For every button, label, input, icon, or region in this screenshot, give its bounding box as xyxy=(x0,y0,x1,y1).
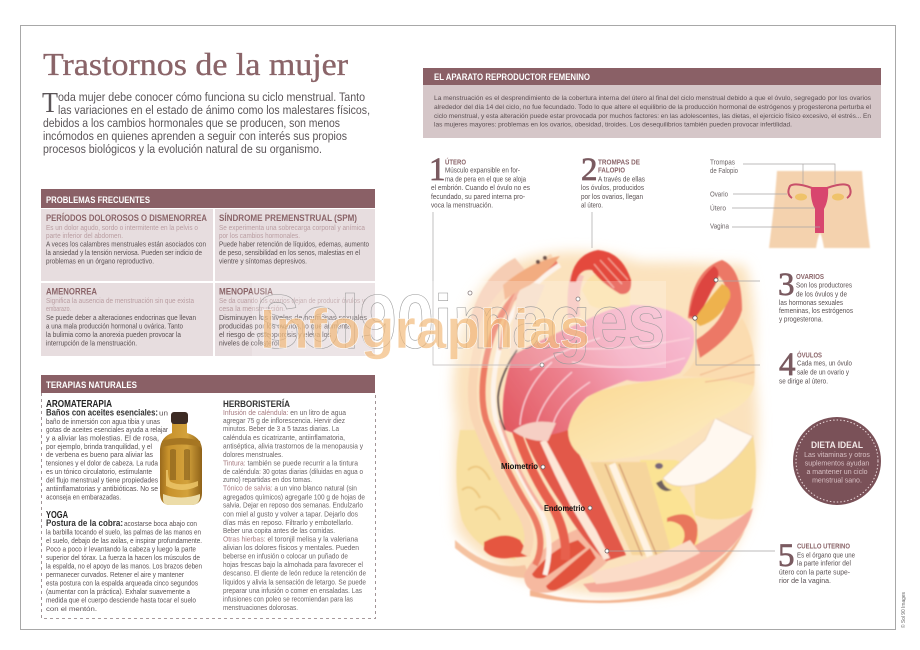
section header xyxy=(41,189,375,208)
diagram leaders xyxy=(732,164,835,227)
callout: dieta ideal: DIETA IDEAL xyxy=(811,440,863,451)
panel: sindrome premenstrual xyxy=(215,209,375,281)
panel: amenorrea: embarazo. xyxy=(46,306,71,313)
text block: yoga: medida que el cuerpo desciende hasta tocar el suelo xyxy=(46,596,196,604)
callout 5: cuello uterino: útero con la parte supe- xyxy=(779,570,851,576)
credit: © Sol 90 Images xyxy=(900,592,907,628)
text block: herboristeria: hojas frescas bajo la almohada para favorecer el xyxy=(223,560,363,569)
explanatory text: La menstruación es el desprendimiento de la cobertura interna del útero al final del ciclo menstrual debido a que el óvulo, segregado por los ovarios xyxy=(434,95,872,102)
text block: herboristeria: antiséptica, alivia trastornos de la menopausia y xyxy=(223,442,363,450)
text block: yoga: con el mentón. xyxy=(46,606,97,613)
text block: herboristeria: dolores menstruales. xyxy=(223,450,283,459)
explanatory text: alrededor del día 14 del ciclo, no fue fecundado. Todo lo que altere el equilibrio de la producción hormonal de estrógenos y progesterona perturba el xyxy=(434,104,871,111)
text block: herboristeria: menstruaciones dolorosas. xyxy=(223,603,298,612)
callout: dieta ideal: Las vitaminas y otros xyxy=(804,452,870,459)
fat left xyxy=(456,430,530,560)
text block: herboristeria: con miel al gusto y volver a tapar. Dejarlo dos xyxy=(223,510,358,518)
callout 2: trompas de falopio xyxy=(581,152,645,210)
intro text block: debidos a los cambios hormonales que se producen, son menos xyxy=(43,116,340,130)
text block: herboristeria: caléndula es cicatrizante, antiinflamatoria, xyxy=(223,433,345,442)
body silhouette xyxy=(769,171,870,248)
cervix / uterine neck column xyxy=(522,430,626,561)
callout 2: trompas de falopio: por los ovarios, llegan xyxy=(581,194,643,201)
panel: amenorrea: Se puede deber a alteraciones endocrinas que llevan xyxy=(46,315,196,322)
callout 4: ovulos: 4 xyxy=(779,347,796,383)
label: miometrio: Miometrio xyxy=(501,462,538,471)
text block: aromaterapia: por ejemplo, brinda tranquilidad, y el xyxy=(46,442,152,451)
callout 4: ovulos: Cada mes, un óvulo xyxy=(797,360,852,368)
text block: aromaterapia: AROMATERAPIA xyxy=(46,399,112,410)
section header xyxy=(423,68,881,85)
text block: yoga xyxy=(46,510,202,613)
panel: dismenorrea: la ansiedad y la tensión nerviosa. Pueden ser indicio de xyxy=(46,250,202,257)
callout 2: trompas de falopio: 2 xyxy=(581,152,598,188)
panel: sindrome premenstrual: Puede haber retención de líquidos, edemas, aumento xyxy=(219,242,369,248)
section: el aparato reproductor femenino xyxy=(423,68,881,138)
vaginal fat column xyxy=(590,462,672,555)
dark line behind uterus xyxy=(498,350,517,430)
text block: aromaterapia: del flujo menstrual y tiene propiedades xyxy=(46,476,158,484)
text block: yoga: esta postura con la espalda arqueada cinco segundos xyxy=(46,578,198,588)
text block: herboristeria: Tónico de salvia: a un vino blanco natural (sin xyxy=(223,484,357,492)
text block: aromaterapia: baño de inmersión con agua tibia y unas xyxy=(46,417,160,426)
callout 2: trompas de falopio: los óvulos, producidos xyxy=(581,185,644,192)
intro text block: oda mujer debe conocer cómo funciona su ciclo menstrual. Tanto xyxy=(58,90,365,104)
speckled tissue xyxy=(470,258,525,350)
white bulge xyxy=(663,418,753,486)
callout 1: utero: 1 xyxy=(429,152,446,188)
callout 3: ovarios: OVARIOS xyxy=(796,274,824,281)
text block: herboristeria: líquidos y alivia la sensación de letargo. Se puede xyxy=(223,578,366,586)
panel: menopausia: niveles de colesterol. xyxy=(219,340,281,348)
text block: yoga: superior del tórax. La fuerza la hacen los músculos de xyxy=(46,553,200,562)
text block: herboristeria: días más en reposo. Filtrarlo y embotellarlo. xyxy=(223,518,353,527)
panel: amenorrea: a una mala producción hormonal u ovárica. Tanto xyxy=(46,324,183,330)
watermark overlay: Infographias xyxy=(260,297,590,360)
panel: dismenorrea: PERÍODOS DOLOROSOS O DISMENORREA xyxy=(46,213,207,224)
text block: herboristeria: agregados químicos) agregarle 100 g de hojas de xyxy=(223,492,365,502)
panel: menopausia: producidas por los ovarios, lo que aumenta xyxy=(219,324,351,330)
panel: dismenorrea: Es un dolor agudo, sordo o intermitente en la pelvis o xyxy=(46,225,198,232)
diagram labels xyxy=(710,160,738,230)
callout 5: cuello uterino xyxy=(778,538,855,585)
text block: aromaterapia: gotas de aceites esenciales ayuda a relajar xyxy=(46,425,168,434)
icon: oil bottle xyxy=(160,412,202,505)
watermark overlay: Sol90images xyxy=(255,280,665,365)
panel: amenorrea: Significa la ausencia de menstruación sin que exista xyxy=(46,298,194,305)
panel: sindrome premenstrual: de peso, sensibilidad en los senos, malestias en el xyxy=(219,250,360,257)
section header: PROBLEMAS FRECUENTES xyxy=(46,195,150,206)
label: endometrio: Endometrio xyxy=(544,504,585,513)
section header xyxy=(41,375,375,393)
panel: amenorrea xyxy=(41,283,213,356)
callout 3: ovarios: 3 xyxy=(778,267,794,303)
panel: sindrome premenstrual: Se experimenta una sobrecarga corporal y anímica xyxy=(219,225,365,232)
leader lines xyxy=(433,212,775,551)
text block: herboristeria: salvia. Dejar en reposo dos semanas. Endulzarlo xyxy=(223,500,363,510)
panel: dismenorrea: parte inferior del abdomen. xyxy=(46,233,123,240)
callout: dieta ideal: menstrual sano. xyxy=(812,478,862,484)
upper left organ wedge xyxy=(503,256,560,300)
text block: aromaterapia xyxy=(46,399,168,502)
text block: yoga: Postura de la cobra: xyxy=(46,518,123,528)
vagina pouch xyxy=(524,528,612,593)
right tube and ovary xyxy=(688,260,742,358)
panel: amenorrea: interrupción de la menstruación. xyxy=(46,340,137,348)
text block: yoga: la barbilla tocando el suelo, las palmas de las manos en xyxy=(46,528,201,536)
rear wall bands xyxy=(472,258,553,555)
text block: herboristeria: preparar una infusión o comer en ensaladas. Las xyxy=(223,586,362,595)
callout 2: trompas de falopio: TROMPAS DE xyxy=(598,160,640,166)
left lower wall outer xyxy=(455,540,530,578)
callout 3: ovarios: de los óvulos y de xyxy=(796,292,847,298)
text block: herboristeria: zumo) repartidas en dos tomas. xyxy=(223,475,312,484)
pelvic fold right xyxy=(682,318,755,386)
callout 1: utero: fecundado, su pared interna pro- xyxy=(431,194,526,201)
text block: yoga: el suelo, debajo de las axilas, e inspirar profundamente. xyxy=(46,536,202,545)
soft background tissue xyxy=(453,252,758,596)
bladder xyxy=(568,378,754,462)
text block: aromaterapia: aconseja en embarazadas. xyxy=(46,492,121,502)
text block: herboristeria: Infusión de caléndula: en un litro de agua xyxy=(223,408,347,417)
section: problemas frecuentes xyxy=(41,189,375,356)
drop cap: T xyxy=(42,88,58,119)
panel: dismenorrea xyxy=(41,209,213,281)
callout 4: ovulos: se dirige al útero. xyxy=(779,378,828,386)
text block: herboristeria: Tintura: también se puede recurrir a la tintura xyxy=(223,458,359,468)
text block: aromaterapia: antiinflamatorias y antibióticas. No se xyxy=(46,484,158,493)
panel: amenorrea: la bulimia como la anorexia pueden provocar la xyxy=(46,332,181,339)
callout 5: cuello uterino: la parte inferior del xyxy=(797,560,851,568)
text block: herboristeria: HERBORISTERÍA xyxy=(223,399,290,410)
panel: dismenorrea: A veces los calambres menstruales están asociados con xyxy=(46,242,206,248)
callout 5: cuello uterino: Es el órgano que une xyxy=(797,552,855,560)
intro text block: las variaciones en el estado de ánimo como los malestares físicos, xyxy=(58,103,370,117)
text panel background xyxy=(423,85,881,138)
text block: aromaterapia: Baños con aceites esenciales: xyxy=(46,408,158,418)
text block: aromaterapia: un xyxy=(159,408,168,418)
section: terapias naturales xyxy=(41,375,376,618)
text block: aromaterapia: y a aliviar las molestias. El de rosa, xyxy=(46,434,159,442)
diagram labels: Trompas xyxy=(710,160,735,166)
callout 2: trompas de falopio: al útero. xyxy=(581,202,603,210)
lower red mass xyxy=(484,535,530,558)
callout 4: ovulos: ÓVULOS xyxy=(797,350,822,360)
text block: yoga: acostarse boca abajo con xyxy=(124,519,197,528)
text block: herboristeria: agregar 75 g de inflorescencia. Hervir diez xyxy=(223,416,345,425)
diagram labels: Útero xyxy=(710,204,726,212)
bottom outer fold xyxy=(530,530,745,603)
text block: herboristeria: minutos. Beber de 3 a 5 tazas diarias. La xyxy=(223,424,340,433)
section header: EL APARATO REPRODUCTOR FEMENINO xyxy=(434,72,590,83)
text block: herboristeria: beberse en infusión o colocar un puñado de xyxy=(223,552,348,560)
callout 3: ovarios: las hormonas sexuales xyxy=(779,300,843,307)
callout 2: trompas de falopio: A través de ellas xyxy=(598,176,645,184)
callout 2: trompas de falopio: FALOPIO xyxy=(598,168,625,174)
callout 3: ovarios: femeninas, los estrógenos xyxy=(779,308,853,315)
text block: herboristeria xyxy=(223,399,366,612)
text block: aromaterapia: de verbena es bueno para aliviar las xyxy=(46,450,153,459)
callout: dieta ideal xyxy=(793,417,881,505)
small locator diagram xyxy=(710,160,870,248)
explanatory text xyxy=(434,95,872,128)
callout 3: ovarios xyxy=(778,267,853,324)
diagram labels: Ovario xyxy=(710,192,728,198)
text block: herboristeria: Otras hierbas: el toronjil melisa y la valeriana xyxy=(223,534,359,544)
text block: herboristeria: Beber una copita antes de las comidas. xyxy=(223,526,335,535)
intro text block: procesos biológicos y la evolución natural de su organismo. xyxy=(43,142,322,156)
text block: herboristeria: de caléndula: 30 gotas diarias (diluidas en agua o xyxy=(223,467,363,476)
callout 1: utero: ÚTERO xyxy=(445,158,466,166)
diagram labels: Vagina xyxy=(710,224,729,230)
text block: yoga: la espalda, no el apoyo de las manos. Los brazos deben xyxy=(46,562,202,570)
callout 5: cuello uterino: 5 xyxy=(778,538,794,574)
left tube xyxy=(568,272,584,320)
panel: menopausia xyxy=(215,283,375,356)
callout 5: cuello uterino: rior de la vagina. xyxy=(779,578,831,585)
text block: yoga: YOGA xyxy=(46,510,68,521)
panel: menopausia: Se da cuando los ovarios dejan de producir óvulos y xyxy=(219,298,365,305)
callout 1: utero: ma de pera en el que se aloja xyxy=(445,176,526,184)
callout 1: utero: el embrión. Cuando el óvulo no es xyxy=(431,185,530,192)
explanatory text: ciclo menstrual, y esta alteración puede estar provocada por muchos factores: en las adolescentes, las dietas, el ejercicio físico excesivo, el estrés... En xyxy=(434,113,871,120)
panel: menopausia: MENOPAUSIA xyxy=(219,286,273,298)
panel: menopausia: el riesgo de osteoporosis y eleva los xyxy=(219,332,331,339)
panel: amenorrea: AMENORREA xyxy=(46,286,97,298)
panel: sindrome premenstrual: por los cambios hormonales. xyxy=(219,233,300,240)
dashed box xyxy=(42,393,376,618)
intro text block: incómodos en quienes aprenden a seguir con interés sus propios xyxy=(43,129,347,143)
uterus body xyxy=(503,305,694,436)
text block: herboristeria: descanso. El diente de león reduce la retención de xyxy=(223,568,366,578)
panel: sindrome premenstrual: SÍNDROME PREMENSTRUAL (SPM) xyxy=(219,213,357,224)
diagram labels: de Falopio xyxy=(710,168,738,175)
callout 3: ovarios: y progesterona. xyxy=(779,316,823,324)
explanatory text: las mujeres mayores: problemas en los ovarios, obesidad, tiroides. Los desequilibrios también pueden provocar infertilidad. xyxy=(434,122,792,128)
text block: herboristeria: alivian los dolores físicos y mentales. Pueden xyxy=(223,543,359,552)
callout: dieta ideal: a mantener un ciclo xyxy=(806,469,868,476)
marker dots xyxy=(468,278,718,553)
yellow region in front of vagina xyxy=(640,460,698,555)
text block: herboristeria: infusiones con poleo se recomiendan para las xyxy=(223,594,353,604)
illustration: reproductive system cross-section xyxy=(453,250,758,603)
callout 4: ovulos: sale de un ovario y xyxy=(797,370,849,376)
bladder ducts xyxy=(655,463,663,469)
red hook xyxy=(667,514,697,556)
panel: menopausia: cesa la menstruación. xyxy=(219,306,285,313)
text block: aromaterapia: tensiones y el dolor de cabeza. La ruda xyxy=(46,458,159,468)
section header: TERAPIAS NATURALES xyxy=(46,380,137,391)
right fat xyxy=(695,435,756,519)
intro text block xyxy=(42,88,370,156)
panel: menopausia: Disminuyen los niveles de hormonas sexuales xyxy=(219,315,368,322)
callout 1: utero: Músculo expansible en for- xyxy=(445,168,521,174)
callout 1: utero xyxy=(429,152,530,210)
lower pink band xyxy=(583,508,753,593)
title: Trastornos de la mujer xyxy=(43,46,348,82)
panel: dismenorrea: problemas en un órgano reproductivo. xyxy=(46,258,154,266)
callout 1: utero: voca la menstruación. xyxy=(431,202,493,210)
text block: aromaterapia: es un tónico circulatorio, estimulante xyxy=(46,467,152,476)
callout: dieta ideal: suplementos ayudan xyxy=(805,460,869,468)
text block: yoga: Poco a poco ir levantando la cabeza y luego la parte xyxy=(46,544,196,554)
reproductive organs xyxy=(788,184,851,233)
text block: yoga: (aumentar con la práctica). Exhalar suavemente a xyxy=(46,587,191,596)
callout 5: cuello uterino: CUELLO UTERINO xyxy=(797,544,850,550)
panel: sindrome premenstrual: vientre y síntomas depresivos. xyxy=(219,258,307,266)
callout 4: ovulos xyxy=(779,347,852,386)
text block: yoga: permanecer curvados. Retener el aire y mantener xyxy=(46,570,184,579)
callout 3: ovarios: Son los productores xyxy=(796,282,852,290)
